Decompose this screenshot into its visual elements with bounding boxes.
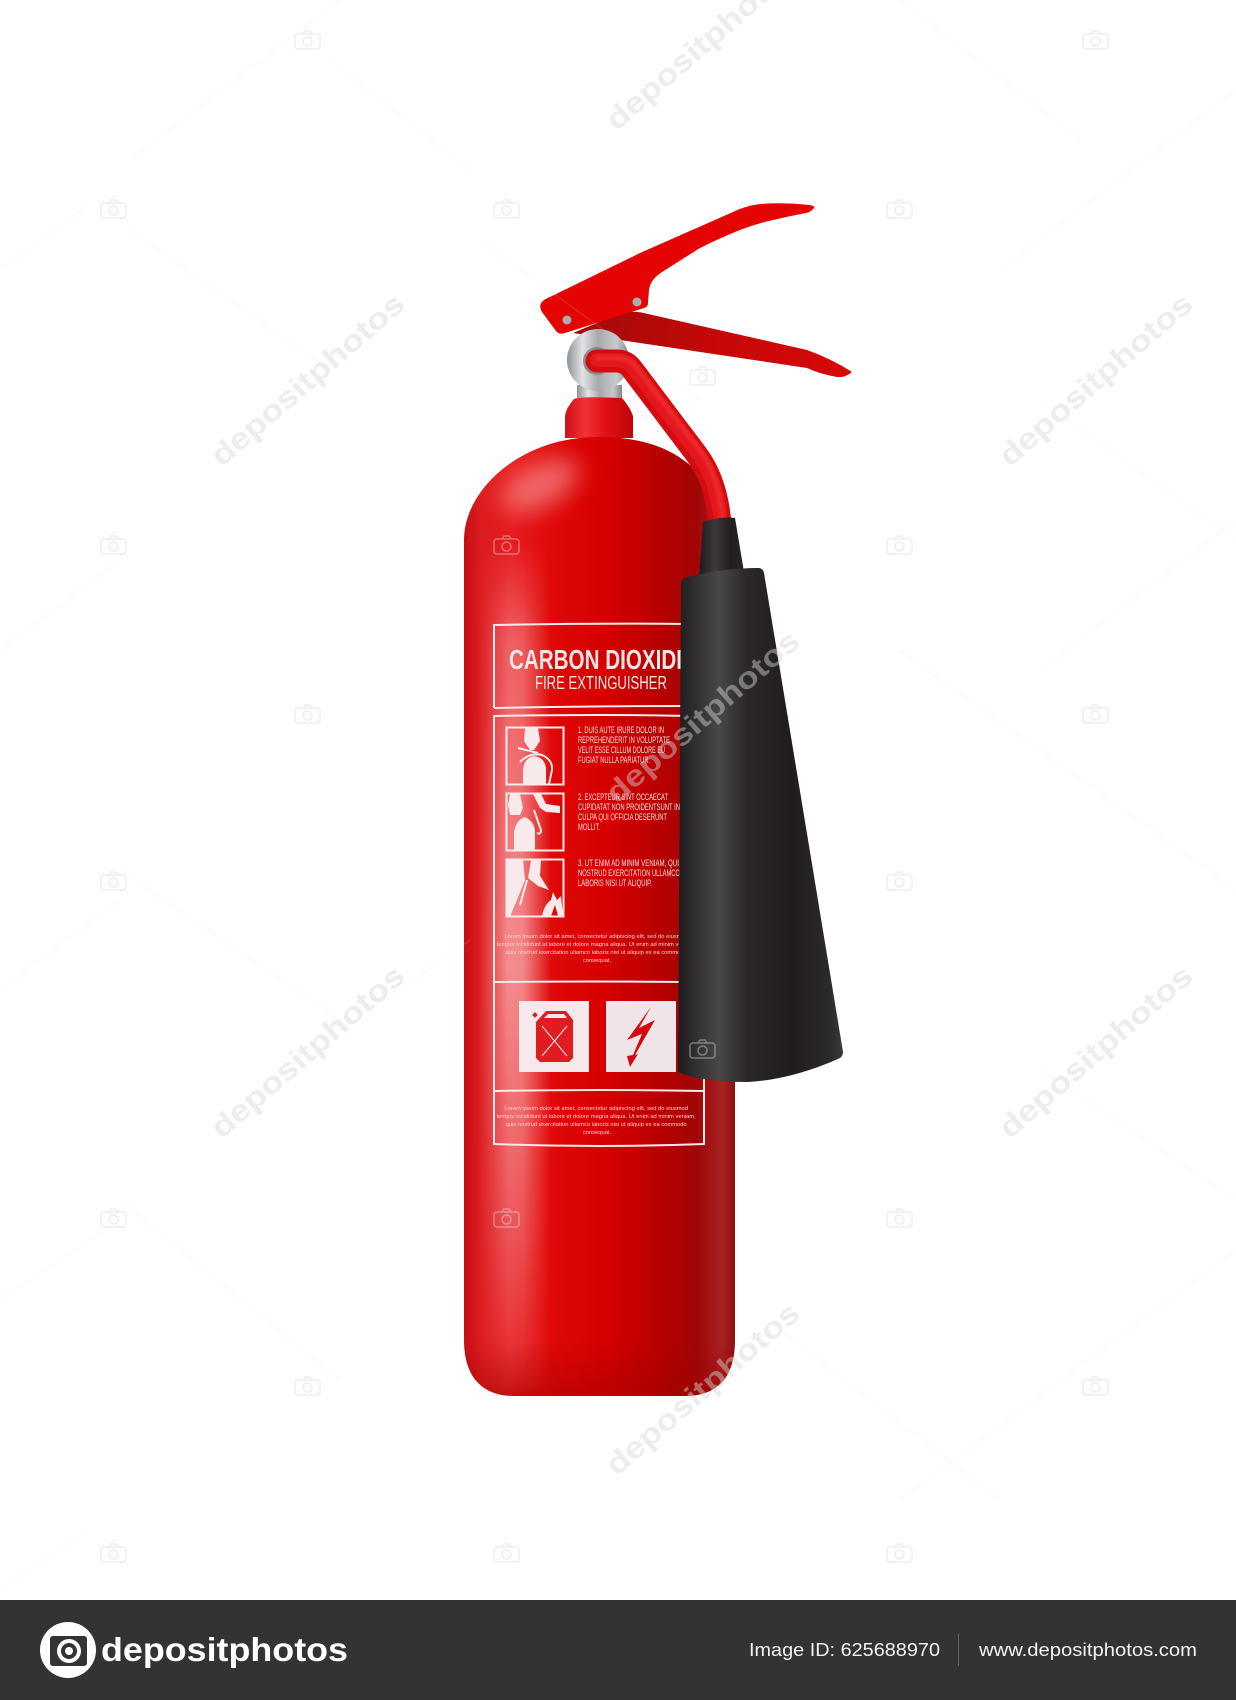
step 2 text: [578, 792, 680, 832]
image id: Image ID: 625688970: [749, 1640, 940, 1660]
electric hazard sign: [606, 1001, 676, 1072]
website: www.depositphotos.com: [978, 1640, 1197, 1660]
step 3 text: NOSTRUD EXERCITATION ULLAMCO: [578, 868, 680, 878]
step 3 text: 3. UT ENIM AD MINIM VENIAM, QUIS: [578, 858, 683, 868]
cylinder body: [460, 437, 740, 1398]
step 3 icon: [506, 860, 564, 917]
footer logo: [40, 1622, 348, 1678]
small print: consequat.: [583, 958, 612, 964]
step 2 icon: [506, 794, 564, 850]
label: [494, 624, 704, 1146]
label title: CARBON DIOXIDE: [509, 644, 690, 675]
extinguisher: [460, 203, 852, 1398]
black horn: [678, 568, 843, 1082]
nozzle base: [699, 518, 745, 578]
watermark text: depositphotos: [600, 624, 806, 810]
step 3 text: LABORIS NISI UT ALIQUIP.: [578, 878, 652, 888]
watermark text: depositphotos: [205, 287, 411, 473]
footer divider: [958, 1634, 959, 1666]
label subtitle: FIRE EXTINGUISHER: [535, 673, 667, 693]
silver valve ball: [567, 329, 629, 391]
step 2 text: 2. EXCEPTEUR SINT OCCAECAT: [578, 792, 668, 802]
discharge tube: [597, 358, 723, 525]
small print: Lorem ipsum dolor sit amet, consectetur adipiscing elit, sed do eiusmod: [504, 934, 688, 940]
upper lever: [540, 203, 814, 334]
logo wordmark: depositphotos: [101, 1631, 348, 1668]
step 1 text: 1. DUIS AUTE IRURE DOLOR IN: [578, 725, 664, 735]
step 1 icon: [506, 728, 564, 784]
bottom small print: quis nostrud exercitation ullamco laboris nisi ut aliquip ex ea commodo: [506, 1122, 687, 1128]
watermark text: depositphotos: [205, 959, 411, 1145]
bottom small print: Lorem ipsum dolor sit amet, consectetur adipiscing elit, sed do eiusmod: [504, 1106, 688, 1112]
watermark text: depositphotos: [993, 959, 1199, 1145]
watermark text: depositphotos: [993, 287, 1199, 473]
step 3 text: [578, 858, 683, 888]
bottom small print: consequat.: [583, 1130, 612, 1136]
step 1 text: FUGIAT NULLA PARIATUR.: [578, 755, 650, 765]
watermark cameras: [101, 31, 1108, 1562]
watermark text: [205, 0, 1199, 1482]
small print: quis nostrud exercitation ullamco laboris nisi ut aliquip ex ea commodo: [506, 950, 687, 956]
step 1 text: VELIT ESSE CILLUM DOLORE EU: [578, 745, 665, 755]
bottom small print: tempor incididunt ut labore et dolore magna aliqua. Ut enim ad minim veniam,: [497, 1114, 696, 1120]
step 2 text: CULPA QUI OFFICIA DESERUNT: [578, 812, 667, 822]
silver neck: [577, 385, 622, 401]
jerry can warning sign: [519, 1001, 589, 1072]
logo badge: [40, 1622, 96, 1678]
step 1 text: REPREHENDERIT IN VOLUPTATE: [578, 735, 670, 745]
step 1 text: [578, 725, 670, 765]
step 2 text: CUPIDATAT NON PROIDENTSUNT IN: [578, 802, 680, 812]
lower lever: [573, 312, 852, 377]
red neck collar: [565, 397, 633, 438]
footer bar: [0, 1600, 1236, 1700]
watermark text: depositphotos: [600, 1296, 806, 1482]
small print: tempor incididunt ut labore et dolore magna aliqua. Ut enim ad minim veniam,: [497, 942, 696, 948]
step 2 text: MOLLIT.: [578, 822, 600, 832]
label frame: [494, 624, 704, 1146]
